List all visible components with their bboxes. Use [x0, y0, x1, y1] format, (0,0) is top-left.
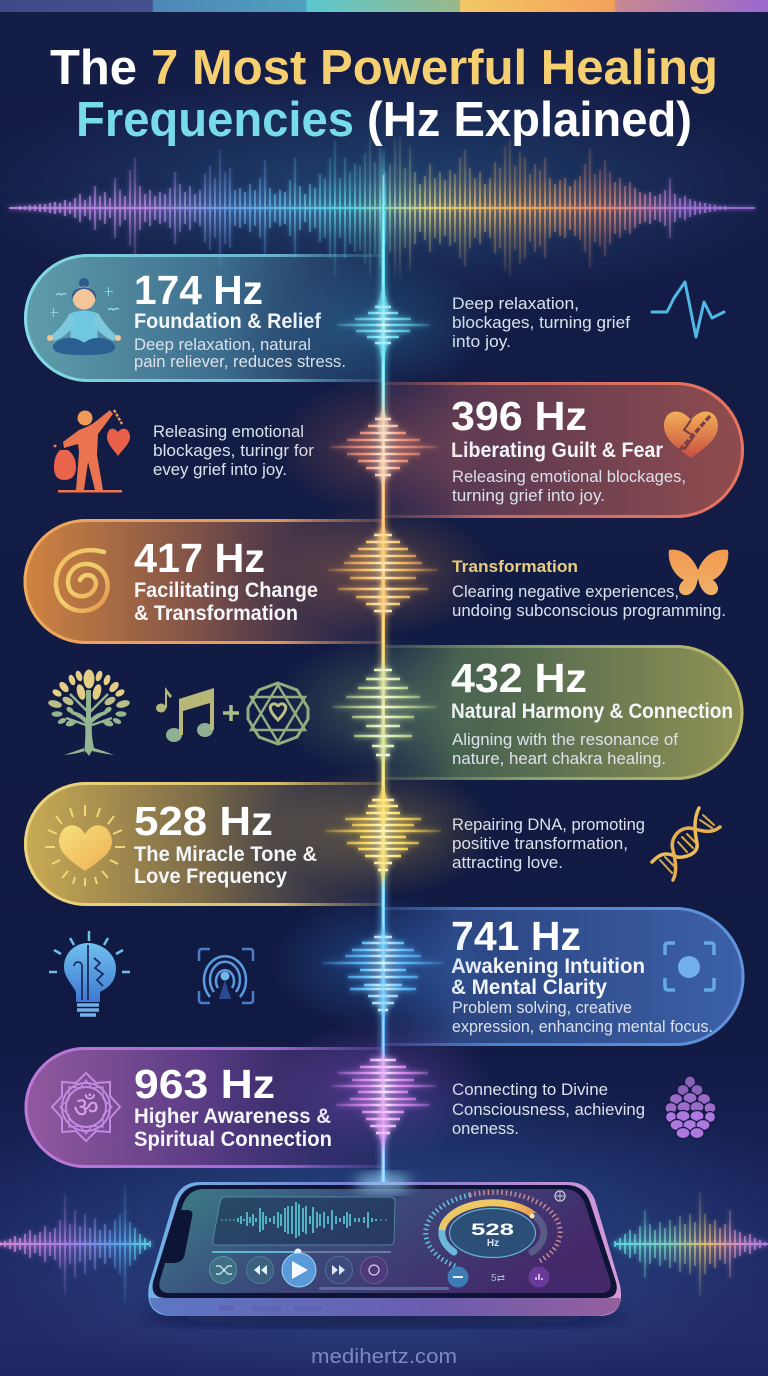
icon: person releasing bag and heart [54, 410, 130, 492]
icon: om lotus mandala: ॐ [73, 1092, 99, 1123]
pill background [24, 782, 384, 906]
side buttons [218, 1305, 325, 1312]
pill outline [384, 908, 743, 1044]
icon: butterfly [669, 550, 728, 595]
side text: 963 Hz: Connecting to Divine [452, 1080, 608, 1099]
description [452, 730, 678, 768]
side text: 396 Hz [153, 422, 314, 479]
burst: 963 Hz [332, 1050, 436, 1150]
top colour bar [0, 0, 768, 12]
burst: 741 Hz [322, 925, 444, 1020]
icon: focus target [665, 943, 714, 990]
icon: meditating person [47, 278, 121, 355]
panel: 963 Hz [24, 1047, 384, 1168]
icon: spiral [56, 550, 108, 611]
pill background [384, 645, 744, 780]
bottom waveform: left [0, 1184, 150, 1304]
description: expression, enhancing mental focus. [452, 1017, 713, 1036]
subtitle: & Mental Clarity [451, 975, 607, 999]
icon: DNA helix [652, 808, 720, 880]
subtitle: & Transformation [134, 601, 298, 625]
panel: 741 Hz [384, 907, 745, 1046]
pill background [384, 907, 745, 1046]
burst: 396 Hz [330, 405, 438, 490]
burst: 417 Hz [328, 520, 438, 620]
description: Aligning with the resonance of [452, 730, 678, 749]
description: nature, heart chakra healing. [452, 749, 666, 768]
pill background [24, 254, 384, 382]
panel: 528 Hz [24, 782, 384, 906]
subtitle: Higher Awareness & [134, 1104, 331, 1128]
pill outline [25, 784, 384, 904]
pill outline [25, 520, 384, 642]
glow behind phone [0, 1075, 768, 1376]
frequency: 963 Hz [134, 1061, 275, 1107]
subtitle: Liberating Guilt & Fear [451, 438, 664, 462]
icon: pine cone [665, 1076, 716, 1138]
subtitle [134, 842, 317, 888]
phone bezel [153, 1185, 617, 1298]
icon: music notes [156, 687, 214, 742]
phone screen [159, 1189, 611, 1293]
icon: lightbulb brain [49, 931, 130, 1015]
side text: 963 Hz: Consciousness, achieving [452, 1100, 645, 1119]
glow behind top waveform [0, 70, 768, 310]
icon: tree [47, 670, 131, 756]
panel: 432 Hz [384, 645, 744, 780]
side text: 396 Hz: Releasing emotional [153, 422, 304, 441]
side text: 174 Hz: blockages, turning grief [452, 313, 630, 332]
title: Frequencies [76, 93, 354, 147]
frequency dial [426, 1192, 560, 1266]
frequency: 741 Hz [451, 913, 581, 959]
icon: pulse [652, 282, 724, 337]
burst: 432 Hz [332, 660, 436, 770]
subtitle: Awakening Intuition [451, 954, 645, 978]
subtitle: The Miracle Tone & [134, 842, 317, 866]
icon: om lotus mandala [52, 1073, 120, 1141]
subtitle [134, 1104, 332, 1151]
pill background [384, 382, 744, 518]
subtitle [451, 954, 645, 999]
side text: 417 Hz [452, 557, 726, 620]
panel: 174 Hz [24, 254, 384, 382]
subtitle: Love Frequency [134, 864, 287, 888]
central frequency beam [382, 145, 385, 1190]
burst: 528 Hz [325, 785, 441, 885]
side text: 528 Hz [452, 815, 645, 872]
description [452, 467, 686, 505]
phone notch [160, 1210, 192, 1263]
audio wave panel [213, 1197, 395, 1245]
side text: 528 Hz: attracting love. [452, 853, 563, 872]
side text: 528 Hz: Repairing DNA, promoting [452, 815, 645, 834]
pill outline [26, 1048, 384, 1166]
frequency: 417 Hz [134, 535, 265, 581]
side text: 174 Hz: Deep relaxation, [452, 294, 579, 313]
panel: 417 Hz [24, 519, 384, 644]
frequency: 528 Hz [134, 798, 273, 844]
center glow halos [268, 259, 498, 1157]
subtitle: Facilitating Change [134, 578, 318, 602]
subtitle: Spiritual Connection [134, 1127, 332, 1151]
icon: heart chakra [248, 683, 308, 744]
phone side edge [150, 1298, 620, 1316]
title: 7 Most Powerful Healing [151, 41, 718, 95]
subtitle: Natural Harmony & Connection [451, 699, 733, 723]
icon: fingerprint scan [199, 949, 253, 1003]
top waveform [10, 136, 755, 280]
subtitle: Foundation & Relief [134, 309, 322, 333]
pill outline [384, 646, 742, 778]
description: Deep relaxation, natural [134, 335, 311, 354]
plus sign [223, 705, 239, 721]
footer website: medihertz.com [311, 1346, 457, 1368]
title: The [50, 41, 137, 95]
player controls [210, 1253, 388, 1287]
pill outline [26, 256, 384, 380]
description: pain reliever, reduces stress. [134, 352, 346, 371]
beam impact flare [355, 1174, 411, 1192]
bottom waveform: right [615, 1192, 768, 1296]
dial buttons: 5⇄ [491, 1273, 505, 1284]
description [452, 998, 713, 1036]
side text: 396 Hz: blockages, turingr for [153, 441, 314, 460]
dial readout: 528 [471, 1220, 514, 1239]
burst: 174 Hz [337, 285, 430, 365]
title [50, 41, 718, 147]
phone body [148, 1182, 621, 1316]
frequency: 174 Hz [134, 267, 263, 313]
icon: glowing heart [45, 805, 125, 886]
panel: 396 Hz [384, 382, 744, 518]
icon: broken heart with chain [664, 411, 718, 458]
phone [144, 1182, 624, 1326]
side text: 417 Hz: undoing subconscious programming. [452, 601, 726, 620]
frequency: 396 Hz [451, 393, 587, 439]
home indicator [319, 1287, 449, 1290]
description: turning grief into joy. [452, 486, 605, 505]
description [134, 335, 346, 371]
description: Releasing emotional blockages, [452, 467, 686, 486]
side text: 174 Hz [452, 294, 630, 351]
pill background [24, 519, 384, 644]
side text: 417 Hz: Transformation [452, 557, 578, 576]
dial unit: Hz [487, 1238, 499, 1249]
side text: 174 Hz: into joy. [452, 332, 511, 351]
side text: 528 Hz: positive transformation, [452, 834, 628, 853]
description: Problem solving, creative [452, 998, 632, 1017]
side text: 417 Hz: Clearing negative experiences, [452, 582, 679, 601]
side text: 963 Hz [452, 1080, 645, 1138]
frequency: 432 Hz [451, 655, 587, 701]
pill background [24, 1047, 384, 1168]
side text: 963 Hz: oneness. [452, 1119, 519, 1138]
subtitle [134, 578, 318, 625]
side text: 396 Hz: evey grief into joy. [153, 460, 287, 479]
dial buttons [448, 1191, 565, 1288]
progress slider [212, 1248, 391, 1256]
title: (Hz Explained) [367, 93, 692, 147]
pill outline [384, 384, 742, 516]
